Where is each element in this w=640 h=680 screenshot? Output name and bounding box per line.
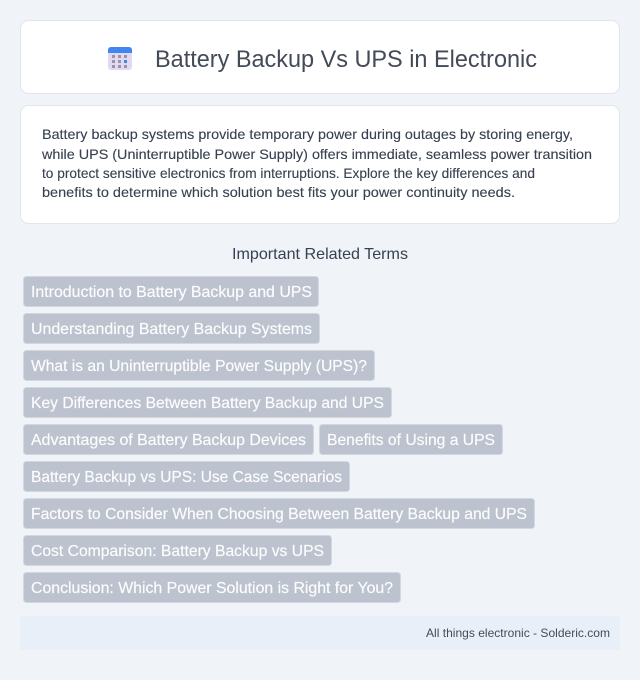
tag: introduction: Introduction to Battery Backup and UPS (31, 284, 312, 301)
panel: introduction text: while UPS (Uninterruptible Power Supply) offers immediate, seamless power transition (41, 146, 592, 162)
panel: introduction text: benefits to determine which solution best fits your power continuity needs. (42, 184, 515, 200)
icon: calendar (108, 47, 132, 70)
tag: advantages: Advantages of Battery Backup Devices (31, 432, 306, 449)
tag: advantages (24, 424, 314, 454)
tag: understanding (24, 314, 320, 344)
panel: introduction text: to protect sensitive electronics from interruptions. Explore the key differences and (42, 165, 535, 181)
tag: use cases: Battery Backup vs UPS: Use Case Scenarios (31, 469, 342, 486)
footer: All things electronic - Solderic.com (426, 626, 610, 640)
panel: introduction text: Battery backup systems provide temporary power during outages by storing energy, (42, 126, 573, 142)
tag: factors (24, 498, 534, 528)
tag: understanding: Understanding Battery Backup Systems (31, 321, 312, 338)
tag: key differences: Key Differences Between Battery Backup and UPS (31, 395, 384, 412)
panel: title header (20, 20, 620, 94)
tag: what is a UPS (24, 350, 374, 380)
tag: benefits (320, 424, 502, 454)
panel: introduction text (20, 106, 620, 224)
tag: cost comparison (24, 536, 332, 566)
tag: benefits: Benefits of Using a UPS (327, 432, 495, 449)
tag: introduction (24, 276, 318, 306)
tag: use cases (24, 462, 350, 492)
title: Battery Backup Vs UPS in Electronic (155, 46, 537, 73)
tag: conclusion (24, 572, 400, 602)
footer (20, 616, 620, 650)
tag: factors: Factors to Consider When Choosing Between Battery Backup and UPS (31, 506, 527, 523)
tag: conclusion: Conclusion: Which Power Solution is Right for You? (31, 580, 393, 597)
tag: cost comparison: Cost Comparison: Battery Backup vs UPS (31, 543, 324, 560)
heading: important related terms: Important Related Terms (232, 246, 408, 263)
tag: what is a UPS: What is an Uninterruptible Power Supply (UPS)? (31, 358, 367, 375)
tag: key differences (24, 388, 392, 418)
